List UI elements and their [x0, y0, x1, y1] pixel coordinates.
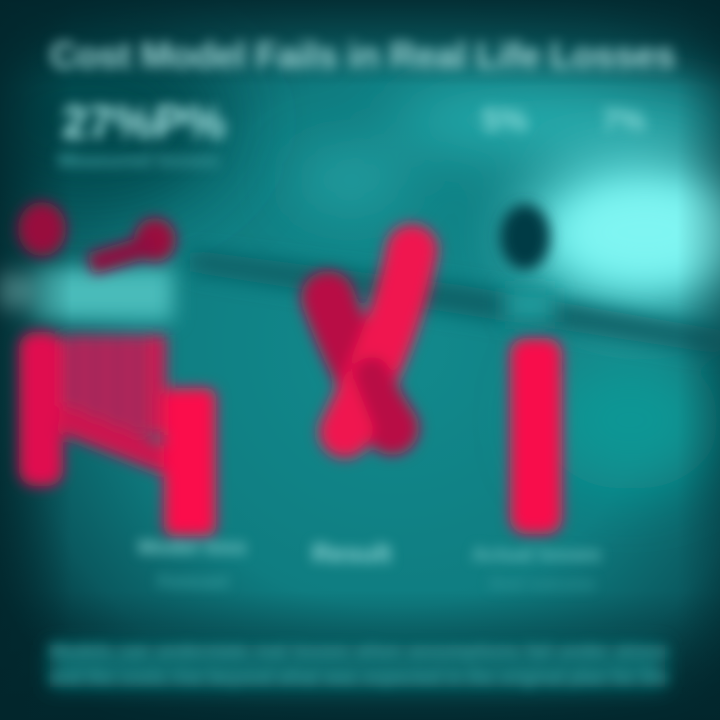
label right: Actual losses — [472, 544, 601, 566]
top left dot — [18, 202, 66, 256]
graphic: exclamation mark — [500, 204, 562, 534]
sublabel left: Forecast — [158, 572, 229, 591]
stat one: 5% — [482, 102, 528, 138]
left bar — [19, 332, 63, 486]
top right dot — [134, 218, 176, 262]
red bar — [510, 338, 562, 534]
graphic: left red figure — [18, 202, 216, 536]
hatched middle bars — [63, 335, 167, 435]
stat two: 7% — [602, 104, 645, 137]
bright cyan glow — [295, 90, 720, 490]
graphic: red X mark — [328, 250, 412, 432]
sublabel right: Real outcome — [490, 576, 595, 593]
big figure: 27%P% — [62, 96, 226, 148]
left glow — [0, 268, 173, 320]
lower connector — [60, 418, 170, 462]
dark diagonal band — [190, 250, 720, 354]
dark dot — [500, 204, 550, 270]
connecting stroke — [90, 244, 155, 264]
upper-left shade — [0, 30, 230, 210]
right tall bar — [164, 388, 216, 536]
pale glow below dot — [505, 288, 555, 322]
label middle: Result — [312, 538, 391, 568]
bottom band — [50, 645, 665, 687]
cyan highlight — [565, 188, 720, 276]
label left: Model loss — [138, 536, 247, 559]
title: Cost Model Fails in Real Life Losses — [50, 35, 675, 76]
figure caption: Measured losses — [58, 150, 219, 172]
